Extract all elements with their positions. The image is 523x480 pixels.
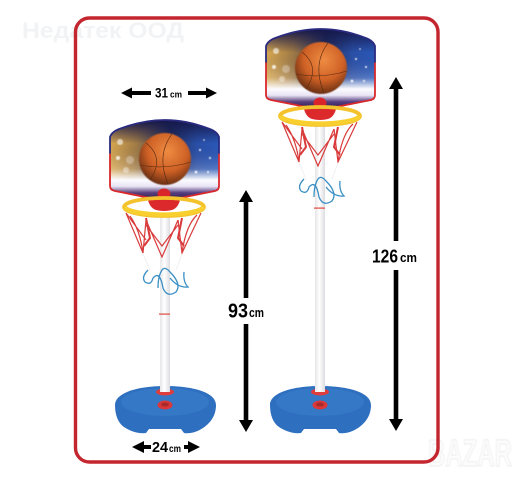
- short basketball stand: [110, 120, 219, 433]
- dimension: width 31 cm: cm: [170, 90, 182, 100]
- short stand: backboard and ball: [110, 120, 219, 216]
- dimension: height 93 cm: [228, 190, 264, 432]
- dimension: base width 24 cm: [132, 439, 200, 456]
- dimension: height 126 cm: [372, 77, 417, 431]
- short stand: rim and net: [124, 204, 204, 294]
- watermark: company name: Недатек ООД: [22, 18, 184, 43]
- tall stand: rim and net: [280, 112, 360, 203]
- dimension: width 31 cm: [121, 86, 217, 100]
- short stand: base: [115, 386, 216, 433]
- dimension: height 93 cm: 93: [228, 300, 248, 322]
- tall stand: backboard and ball: [266, 29, 375, 125]
- tall stand: base: [270, 386, 371, 433]
- red rounded frame: [76, 18, 438, 462]
- dimension: height 93 cm: cm: [249, 305, 264, 320]
- dimension: base width 24 cm: cm: [169, 443, 181, 455]
- dimension: height 126 cm: cm: [400, 251, 417, 265]
- dimension: height 126 cm: 126: [372, 246, 398, 266]
- dimension: base width 24 cm: 24: [152, 439, 169, 456]
- tall basketball stand: [266, 29, 375, 433]
- tall stand: pole: [314, 122, 325, 392]
- short stand: pole: [159, 214, 170, 392]
- dimension: width 31 cm: 31: [155, 86, 168, 100]
